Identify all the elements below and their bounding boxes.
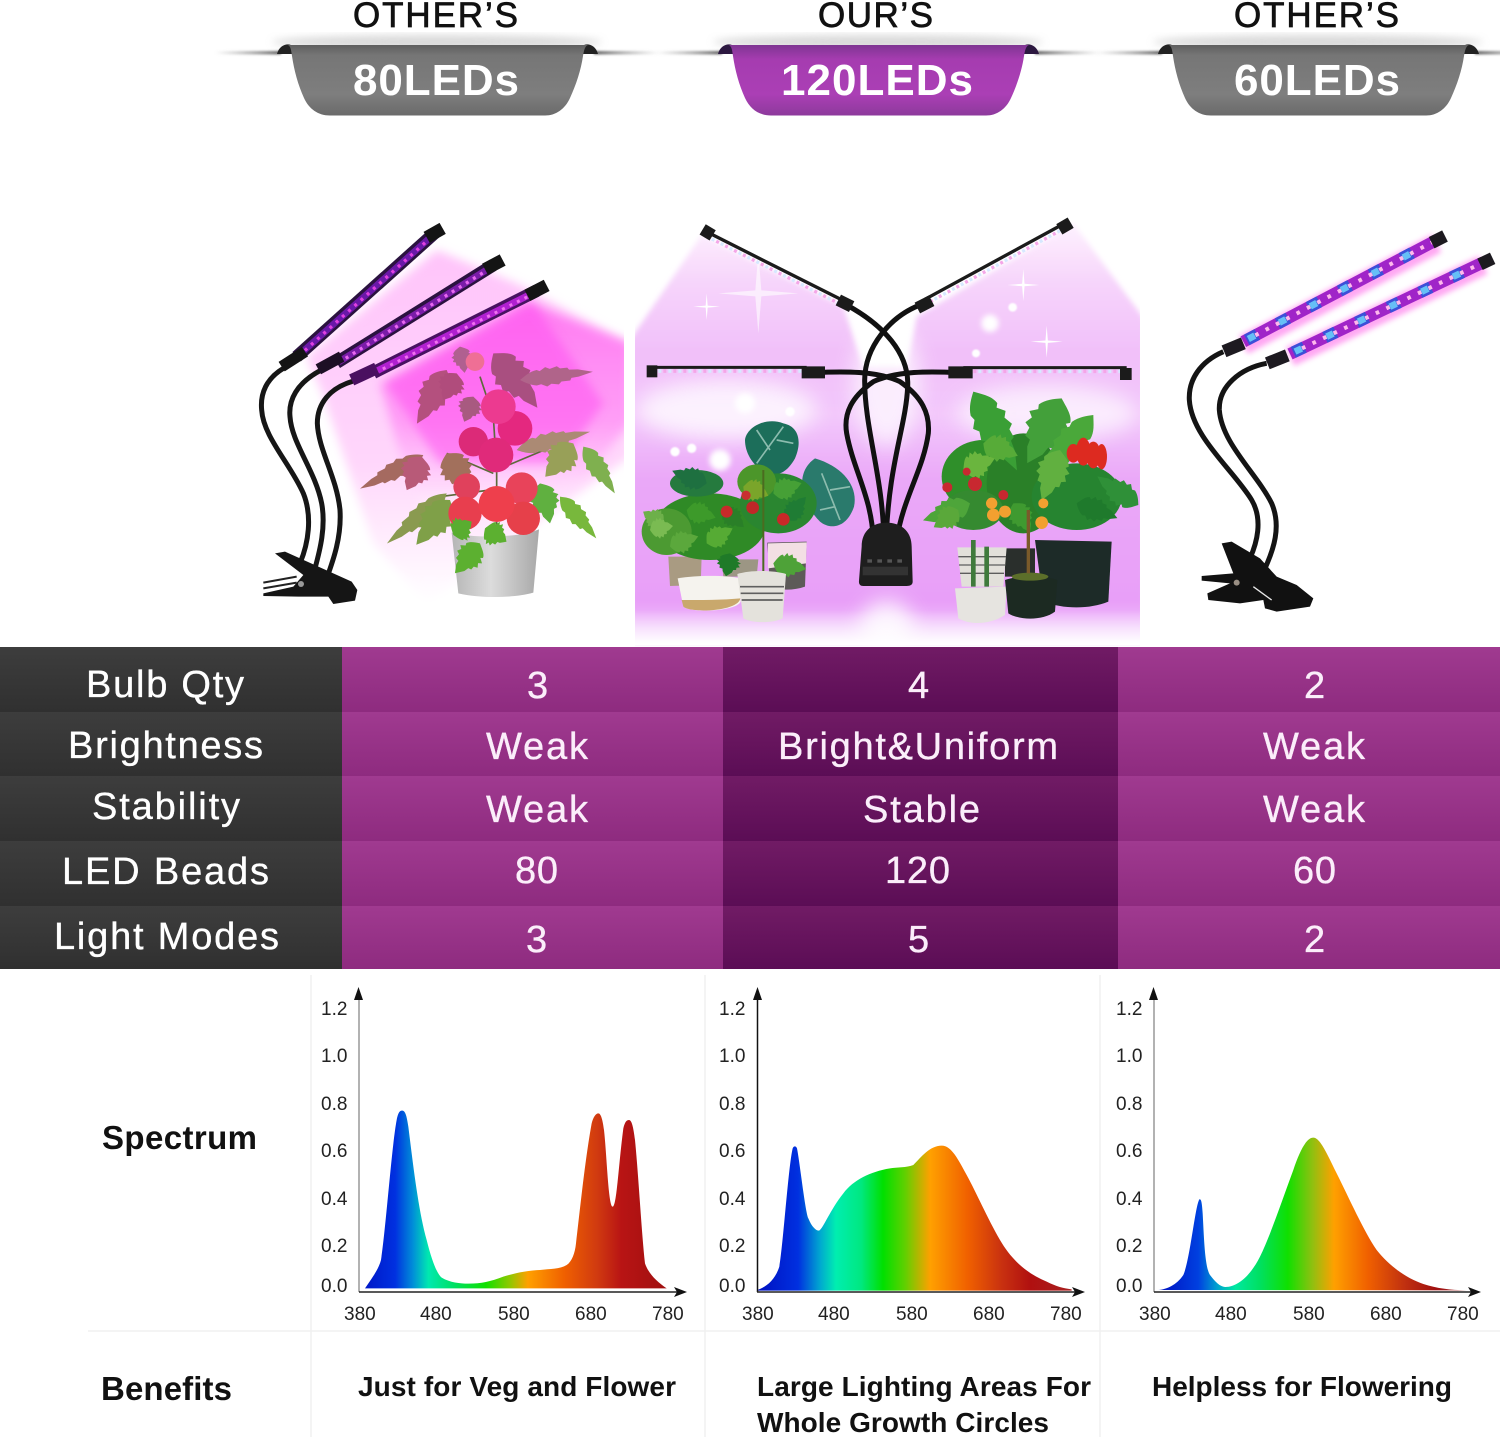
chart: spectrum 120 LEDs: 0.8 <box>719 1094 745 1115</box>
lamp bars <box>647 223 1132 374</box>
chart: spectrum 80 LEDs: 0.6 <box>321 1141 347 1162</box>
chart: spectrum 120 LEDs <box>719 987 1085 1325</box>
lamp arms <box>261 368 352 578</box>
chart: spectrum 60 LEDs: 0.2 <box>1116 1236 1142 1257</box>
chart: spectrum 80 LEDs: 680 <box>575 1304 607 1325</box>
column: other's 80 LEDs: Weak <box>486 789 589 831</box>
chart: spectrum 80 LEDs: 0.8 <box>321 1094 347 1115</box>
chart: spectrum 60 LEDs: 380 <box>1139 1304 1171 1325</box>
column: other's 80 LEDs: 80 <box>515 850 558 892</box>
chart: spectrum 60 LEDs: 0.8 <box>1116 1094 1142 1115</box>
column: our's 120 LEDs <box>723 647 1118 969</box>
chart: spectrum 60 LEDs: 0.4 <box>1116 1189 1143 1210</box>
left plants <box>638 421 855 622</box>
column: row labels: LED Beads <box>62 851 269 893</box>
pot <box>452 529 539 597</box>
heading: other's 60 LEDs <box>1096 0 1500 116</box>
column: our's 120 LEDs: Bright&Uniform <box>778 726 1058 768</box>
lamp bars <box>1224 236 1493 363</box>
benefit: 60 LEDs: Helpless for Flowering <box>1152 1371 1452 1402</box>
clip base <box>1202 542 1313 612</box>
pots <box>678 576 741 611</box>
chart: spectrum 120 LEDs: 0.4 <box>719 1189 746 1210</box>
column: other's 60 LEDs: Weak <box>1263 789 1366 831</box>
heading: our's 120 LEDs <box>656 0 1101 116</box>
badge text: 80LEDs: 80LEDs <box>353 56 519 105</box>
chart: spectrum 60 LEDs: 0.6 <box>1116 1141 1142 1162</box>
chart: spectrum 120 LEDs: 380 <box>742 1304 774 1325</box>
column: other's 80 LEDs: 3 <box>527 665 548 707</box>
chart: spectrum 120 LEDs: 1.2 <box>719 999 745 1020</box>
peppers <box>1067 438 1107 469</box>
column: other's 80 LEDs: 3 <box>526 919 547 961</box>
column: our's 120 LEDs: Stable <box>863 789 980 831</box>
tomato plant <box>356 341 624 597</box>
chart: spectrum 60 LEDs: 480 <box>1215 1304 1247 1325</box>
comparison table <box>0 647 1500 969</box>
chart: spectrum 60 LEDs: 680 <box>1370 1304 1402 1325</box>
column: other's 80 LEDs <box>342 647 723 969</box>
chart: spectrum 80 LEDs: 1.0 <box>321 1046 347 1067</box>
column: other's 60 LEDs: 60 <box>1293 850 1336 892</box>
heading: other's 80 LEDs <box>215 0 660 116</box>
ribbon: 80LEDs <box>288 45 588 116</box>
badge text: 120LEDs: 120LEDs <box>781 56 973 105</box>
badge text: 60LEDs: 60LEDs <box>1234 56 1400 105</box>
column: our's 120 LEDs: 120 <box>885 850 950 892</box>
lamp arms <box>813 305 958 543</box>
column: other's 60 LEDs: Weak <box>1263 726 1366 768</box>
column: other's 60 LEDs <box>1118 647 1500 969</box>
clip base <box>263 552 357 604</box>
photo: 3-head lamp with tomato plant <box>261 228 630 604</box>
photo: 4-head lamp with plants <box>630 223 1150 653</box>
chart: spectrum 120 LEDs: 680 <box>973 1304 1005 1325</box>
chart: spectrum 80 LEDs: 380 <box>344 1304 376 1325</box>
chart: spectrum 80 LEDs: 480 <box>420 1304 452 1325</box>
row heading: Benefits: Benefits <box>101 1370 232 1407</box>
chart: spectrum 80 LEDs: 1.2 <box>321 999 347 1020</box>
chart: spectrum 120 LEDs: 580 <box>896 1304 928 1325</box>
controller base <box>859 523 913 586</box>
column: row labels: Light Modes <box>54 916 279 958</box>
column: other's 60 LEDs: 2 <box>1304 665 1325 707</box>
column: our's 120 LEDs: 4 <box>908 665 929 707</box>
pots <box>957 547 1007 587</box>
chart: spectrum 80 LEDs: 0.0 <box>321 1276 347 1297</box>
photo: 2-head lamp <box>1189 236 1493 612</box>
column: row labels <box>0 647 342 969</box>
column: our's 120 LEDs: 5 <box>908 919 929 961</box>
lamp bars <box>282 228 547 380</box>
column: other's 60 LEDs: 2 <box>1304 919 1325 961</box>
fruit <box>986 498 1048 529</box>
chart: spectrum 60 LEDs: 0.0 <box>1116 1276 1142 1297</box>
chart: spectrum 60 LEDs <box>1116 987 1481 1325</box>
chart: spectrum 120 LEDs: 1.0 <box>719 1046 745 1067</box>
ribbon: 120LEDs <box>729 45 1029 116</box>
right plants <box>919 383 1146 623</box>
ribbon: 60LEDs <box>1169 45 1469 116</box>
fruit <box>721 506 733 518</box>
column: other's 80 LEDs: Weak <box>486 726 589 768</box>
chart: spectrum 120 LEDs: 0.6 <box>719 1141 745 1162</box>
chart: spectrum 120 LEDs: 0.2 <box>719 1236 745 1257</box>
chart: spectrum 60 LEDs: 780 <box>1447 1304 1479 1325</box>
chart: spectrum 60 LEDs: 580 <box>1293 1304 1325 1325</box>
chart: spectrum 80 LEDs: 0.4 <box>321 1189 348 1210</box>
chart: spectrum 120 LEDs: 480 <box>818 1304 850 1325</box>
benefit: 80 LEDs: Just for Veg and Flower <box>358 1371 676 1402</box>
glow <box>1243 243 1483 357</box>
chart: spectrum 60 LEDs: 1.2 <box>1116 999 1142 1020</box>
column: row labels: Stability <box>92 786 240 828</box>
light background <box>630 223 1150 653</box>
chart: spectrum 120 LEDs: 780 <box>1050 1304 1082 1325</box>
chart: spectrum 60 LEDs: 1.0 <box>1116 1046 1142 1067</box>
column: row labels: Bulb Qty <box>86 664 244 706</box>
chart: spectrum 80 LEDs: 0.2 <box>321 1236 347 1257</box>
chart: spectrum 120 LEDs: 0.0 <box>719 1276 745 1297</box>
chart: spectrum 80 LEDs <box>321 987 687 1325</box>
chart: spectrum 80 LEDs: 780 <box>652 1304 684 1325</box>
benefit: 120 LEDs: Large Lighting Areas For <box>757 1371 1091 1402</box>
lamp arms <box>1189 352 1276 568</box>
sparkles <box>670 253 1063 471</box>
column: row labels: Brightness <box>68 725 263 767</box>
chart: spectrum 80 LEDs: 580 <box>498 1304 530 1325</box>
row heading: Spectrum: Spectrum <box>102 1119 257 1156</box>
